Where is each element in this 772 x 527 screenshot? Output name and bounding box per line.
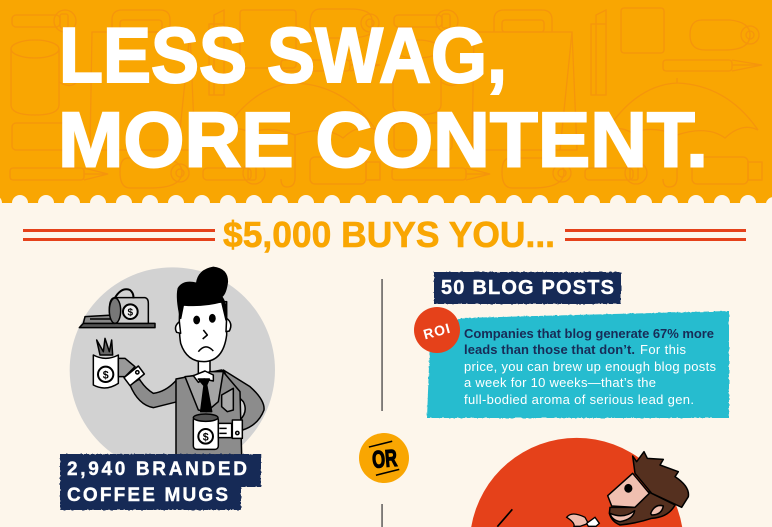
- left hand and cuff: [118, 358, 144, 386]
- pencil mug: $: [103, 369, 109, 381]
- ROI text: leads than those that don’t.: [464, 342, 635, 357]
- head: [608, 452, 688, 525]
- label: coffee mugs: COFFEE MUGS: [67, 485, 228, 506]
- ROI text: full-bodied aroma of serious lead gen.: [464, 392, 694, 407]
- neck and face: [175, 267, 231, 373]
- mug on shelf: $: [128, 307, 134, 318]
- front mug: [193, 414, 242, 449]
- header band: [0, 0, 772, 211]
- shelf: [79, 315, 155, 328]
- illustration: content man in red circle: [471, 438, 688, 527]
- label: coffee mugs: 2,940 BRANDED: [67, 459, 247, 480]
- heading rules: [23, 229, 746, 241]
- ROI text: For this: [640, 342, 686, 357]
- label: coffee mugs: [60, 454, 261, 510]
- teal ROI callout: [427, 311, 729, 418]
- section heading: $5,000 BUYS YOU...: [223, 214, 555, 255]
- ROI badge: [414, 307, 460, 353]
- ROI badge: ROI: [421, 320, 453, 342]
- ROI text: price, you can brew up enough blog posts: [464, 359, 716, 374]
- grey circle: [70, 267, 275, 473]
- scalloped edge: [0, 195, 772, 211]
- collar and tie: [185, 371, 233, 412]
- red circle: [471, 438, 682, 527]
- title: MORE CONTENT.: [58, 96, 708, 184]
- background swag pattern: [10, 8, 762, 188]
- title: [58, 11, 708, 184]
- ROI text: Companies that blog generate 67% more: [464, 326, 714, 341]
- arm line: [497, 509, 512, 527]
- mug on shelf: [109, 289, 148, 323]
- label: blog posts: [434, 272, 621, 304]
- label: blog posts: 50 BLOG POSTS: [441, 277, 614, 299]
- ROI text: a week for 10 weeks—that’s the: [464, 375, 656, 390]
- ROI text: [464, 326, 716, 407]
- OR badge: OR: [371, 445, 398, 474]
- vertical divider: [381, 279, 383, 527]
- left arm: [130, 379, 177, 408]
- title: LESS SWAG,: [59, 11, 507, 99]
- jacket: [176, 370, 242, 455]
- illustration: man with branded mugs: [70, 267, 275, 473]
- OR badge: [359, 433, 409, 483]
- right arm: [223, 370, 264, 430]
- hand and cuff: [567, 514, 599, 526]
- pencil mug: [93, 338, 118, 388]
- front mug: $: [203, 431, 209, 443]
- hair: [178, 267, 227, 320]
